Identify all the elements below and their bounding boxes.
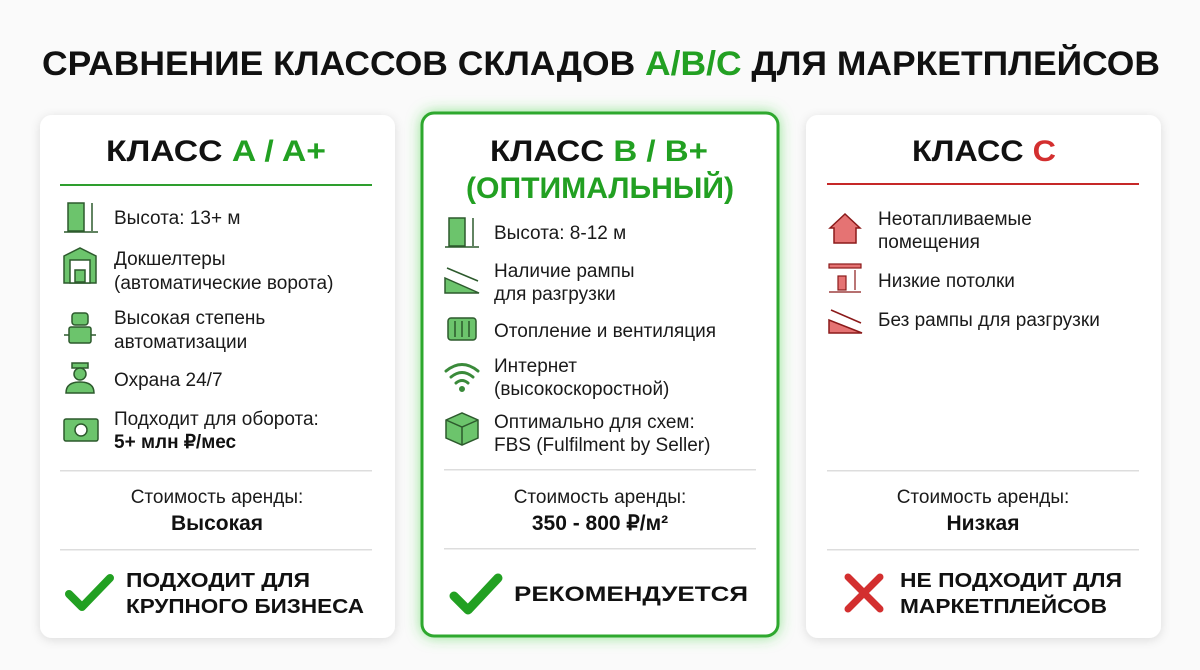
heading B: КЛАСС B / B+ [490, 135, 708, 168]
verdict B: РЕКОМЕНДУЕТСЯ [514, 583, 748, 606]
icon: building [64, 203, 98, 232]
panel: class A: 5+ млн ₽/мес [114, 432, 237, 453]
panel: class B [422, 113, 778, 636]
heading A: КЛАСС A / A+ [106, 135, 326, 168]
panel: class B: FBS (Fulfilment by Seller) [494, 435, 710, 456]
item: no ramp: Без рампы для разгрузки [878, 310, 1100, 331]
item: internet: Интернет [494, 356, 577, 377]
panel: class C: Низкая [947, 512, 1019, 535]
item: dock text: Докшелтеры [114, 249, 226, 270]
cost A: Стоимость аренды: [131, 487, 303, 508]
icon: money [64, 419, 98, 441]
panel: class B: (высокоскоростной) [494, 379, 669, 400]
panel: class B: 350 - 800 ₽/м² [532, 512, 668, 535]
icon: guard [66, 363, 94, 393]
item: height: Высота: 13+ м [114, 208, 240, 229]
panel: class C [806, 115, 1161, 638]
icon: robot [64, 313, 96, 343]
cost C: Стоимость аренды: [897, 487, 1069, 508]
icon: no ramp [829, 310, 862, 333]
panel: class B: (ОПТИМАЛЬНЫЙ) [466, 171, 734, 205]
icon: low ceiling [829, 264, 861, 292]
panel: class A [40, 115, 395, 638]
item: ramp: Наличие рампы [494, 261, 634, 282]
item: low ceilings: Низкие потолки [878, 271, 1015, 292]
icon: dock [64, 248, 96, 283]
icon: box [446, 413, 478, 445]
icon: check [69, 578, 110, 607]
panel: class A: автоматизации [114, 332, 247, 353]
panel: class A: (автоматические ворота) [114, 273, 333, 294]
icon: check B [454, 578, 498, 610]
panel: class B: для разгрузки [494, 284, 616, 305]
title: СРАВНЕНИЕ КЛАССОВ СКЛАДОВ A/B/C ДЛЯ МАРКЕТПЛЕЙСОВ [42, 44, 1160, 83]
item: automation: Высокая степень [114, 308, 265, 329]
item: height B: Высота: 8-12 м [494, 223, 626, 244]
heading C: КЛАСС C [912, 135, 1056, 168]
panel: class C: МАРКЕТПЛЕЙСОВ [900, 594, 1107, 618]
item: turnover: Подходит для оборота: [114, 409, 319, 430]
icon: building B [445, 218, 479, 247]
verdict C: НЕ ПОДХОДИТ ДЛЯ [900, 570, 1122, 592]
panel: class A: КРУПНОГО БИЗНЕСА [126, 596, 364, 618]
verdict A: ПОДХОДИТ ДЛЯ [126, 570, 310, 592]
item: unheated: Неотапливаемые [878, 209, 1032, 230]
cost B: Стоимость аренды: [514, 487, 686, 508]
icon: radiator [448, 318, 476, 340]
item: heating: Отопление и вентиляция [494, 321, 716, 342]
panel: class A: Высокая [171, 512, 263, 535]
icon: wifi [446, 364, 478, 390]
icon: cross [848, 577, 880, 609]
icon: ramp [445, 268, 479, 293]
item: FBS: Оптимально для схем: [494, 412, 695, 433]
item: security: Охрана 24/7 [114, 370, 223, 391]
icon: house [830, 214, 860, 243]
panel: class C: помещения [878, 232, 980, 253]
